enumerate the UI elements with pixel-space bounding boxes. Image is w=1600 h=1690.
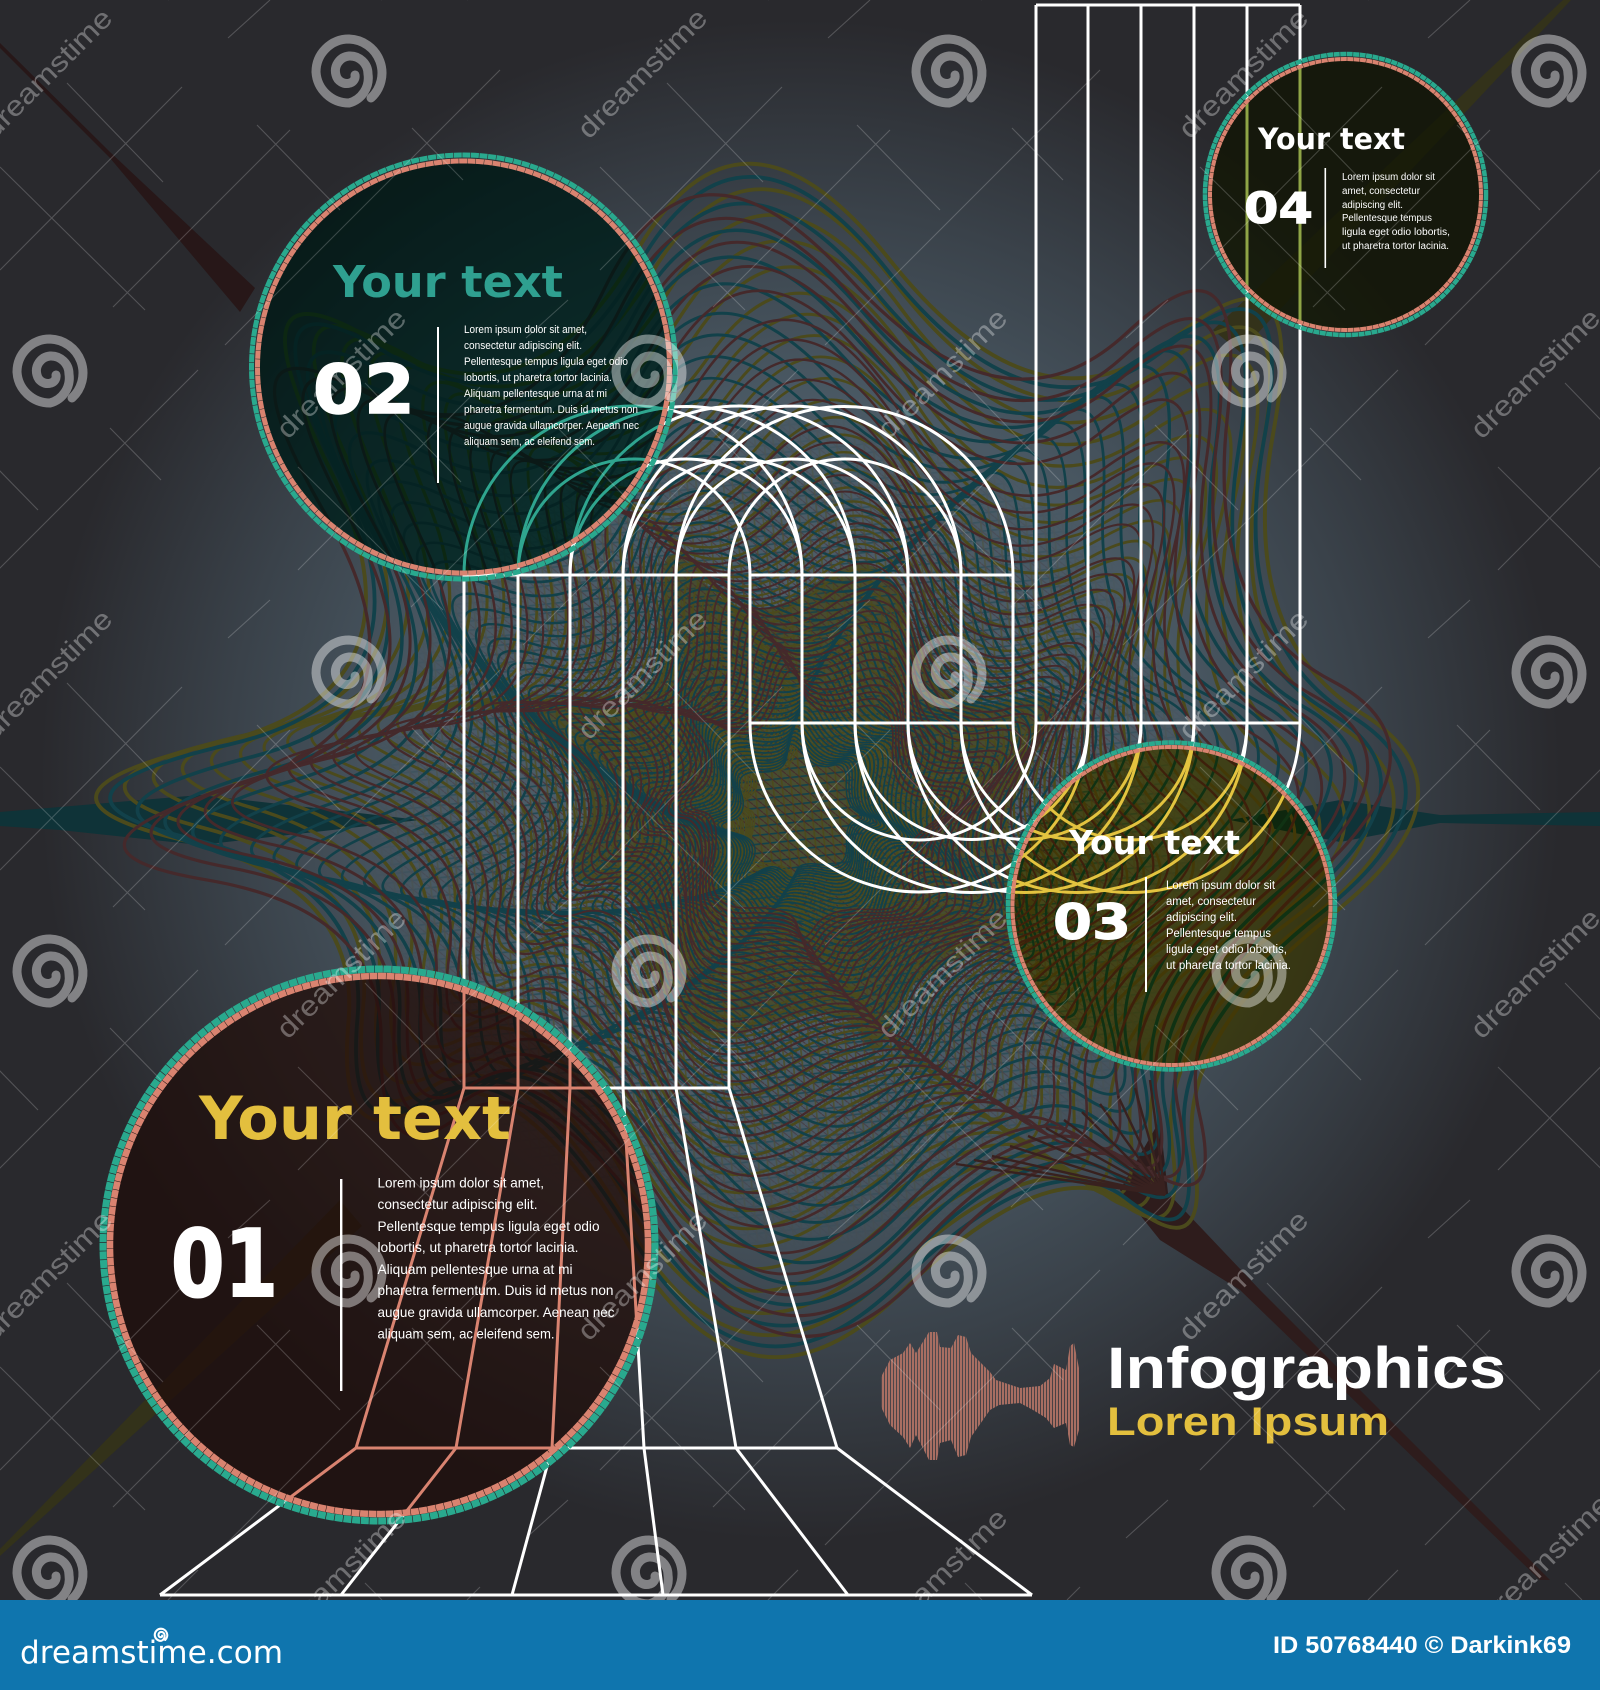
circle 01 heading: Your text [198,1084,511,1154]
circle 02 body text: lobortis, ut pharetra tortor lacinia. [464,372,612,384]
central olive star fill [431,464,1134,1136]
white wireframe pipe [160,5,1300,1595]
circle 04 body text: Lorem ipsum dolor sit [1342,172,1435,183]
watermark wordmarks: dreamstime [571,603,713,745]
circle 04 body text: adipiscing elit. [1342,200,1403,211]
watermark wordmarks: dreamstime [571,2,713,144]
panel: circle 01 [103,969,655,1521]
circle 03 body text: Lorem ipsum dolor sit [1166,880,1276,892]
panel: circle 03 [1008,742,1335,1070]
watermark wordmarks: dreamstime [270,302,412,444]
circle 01 body text: Lorem ipsum dolor sit amet, [378,1174,544,1190]
circle 01 divider [340,1179,342,1391]
circle 02 body text [464,324,639,448]
circle 03 disc [1010,745,1332,1067]
circle 01 body text: Aliquam pellentesque urna at mi [378,1261,572,1277]
circle 01 body text: lobortis, ut pharetra tortor lacinia. [378,1239,578,1255]
footer image id: ID 50768440 © Darkink69 [1273,1632,1571,1659]
circle 04 body text: Pellentesque tempus [1342,213,1432,224]
circle 01 body text: consectetur adipiscing elit. [378,1196,538,1212]
circle 03 ring [1008,742,1335,1070]
circle 02 body text: aliquam sem, ac eleifend sem. [464,436,595,448]
circle 04 disc [1208,58,1482,332]
circle 04 body text: ligula eget odio lobortis, [1342,227,1450,238]
circle 02 body text: Aliquam pellentesque urna at mi [464,388,607,400]
circle 01 body text: augue gravida ullamcorper. Aenean nec [378,1304,614,1320]
circle 04 heading: Your text [1257,122,1405,156]
circle 03 body text: ut pharetra tortor lacinia. [1166,960,1291,972]
watermark wordmarks: dreamstime [1464,902,1600,1044]
panel: circle 02 [252,155,676,579]
watermark wordmarks: dreamstime [270,1502,412,1644]
circle 02 body text: augue gravida ullamcorper. Aenean nec [464,420,639,432]
circle 04 number: 04 [1244,184,1313,234]
circle 04 divider [1324,168,1326,268]
central moire grid [396,435,1173,1222]
title: Infographics [1107,1336,1506,1401]
circle 03 body text: ligula eget odio lobortis, [1166,944,1287,956]
circle 04 body text: ut pharetra tortor lacinia. [1342,241,1449,252]
watermark wordmarks: dreamstime [871,302,1013,444]
circle 04 body text: amet, consectetur [1342,186,1421,197]
circle 02 divider [437,327,439,483]
circle 01 ring [103,969,655,1521]
circle 02 body text: pharetra fermentum. Duis id metus non [464,404,638,416]
circle 01 body text: pharetra fermentum. Duis id metus non [378,1282,614,1298]
maroon fan into lower right spike [956,1080,1165,1195]
circle 01 number: 01 [171,1210,278,1318]
circle 03 body text: amet, consectetur [1166,896,1256,908]
circle 01 body text [378,1174,614,1342]
circle 02 body text: Lorem ipsum dolor sit amet, [464,324,587,336]
circle 02 ring [252,155,676,579]
circle 03 body text: adipiscing elit. [1166,912,1237,924]
maroon curve family [82,150,1428,1382]
watermark wordmarks: dreamstime [571,1204,713,1346]
circle 02 body text: consectetur adipiscing elit. [464,340,582,352]
circle 03 heading: Your text [1068,823,1240,862]
panel: circle 04 [1205,54,1486,335]
watermark wordmarks: dreamstime [871,1502,1013,1644]
watermark wordmarks: dreamstime [871,902,1013,1044]
footer logo text: dreamstime.com [20,1635,283,1671]
circle 03 body text [1166,880,1291,972]
circle 01 body text: Pellentesque tempus ligula eget odio [378,1218,600,1234]
circle 04 ring [1205,54,1486,335]
icon: sound waveform [881,1332,1079,1460]
teal curve family [110,177,1406,1346]
watermark wordmarks: dreamstime [1464,302,1600,444]
watermark wordmarks: dreamstime [1172,603,1314,745]
circle 04 body text [1342,172,1450,252]
circle 03 number: 03 [1053,894,1131,951]
circle 01 disc [107,973,651,1517]
circle 01 body text: aliquam sem, ac eleifend sem. [378,1326,554,1342]
dark underlays beneath the circles [107,58,1482,1517]
watermark wordmarks: dreamstime [1474,1488,1600,1630]
circle 03 body text: Pellentesque tempus [1166,928,1271,940]
circle 03 divider [1145,877,1147,992]
watermark wordmarks: dreamstime [270,902,412,1044]
circle 02 disc [256,159,672,575]
footer logo spiral [155,1629,167,1641]
circle 02 body text: Pellentesque tempus ligula eget odio [464,356,628,368]
footer bar [0,1600,1600,1690]
olive curve family [96,164,1418,1357]
circle 02 number: 02 [313,351,415,430]
subtitle: Loren Ipsum [1107,1400,1389,1444]
watermark wordmarks: dreamstime [1172,1204,1314,1346]
circle 02 heading: Your text [332,257,563,308]
watermark wordmarks: dreamstime [1172,2,1314,144]
